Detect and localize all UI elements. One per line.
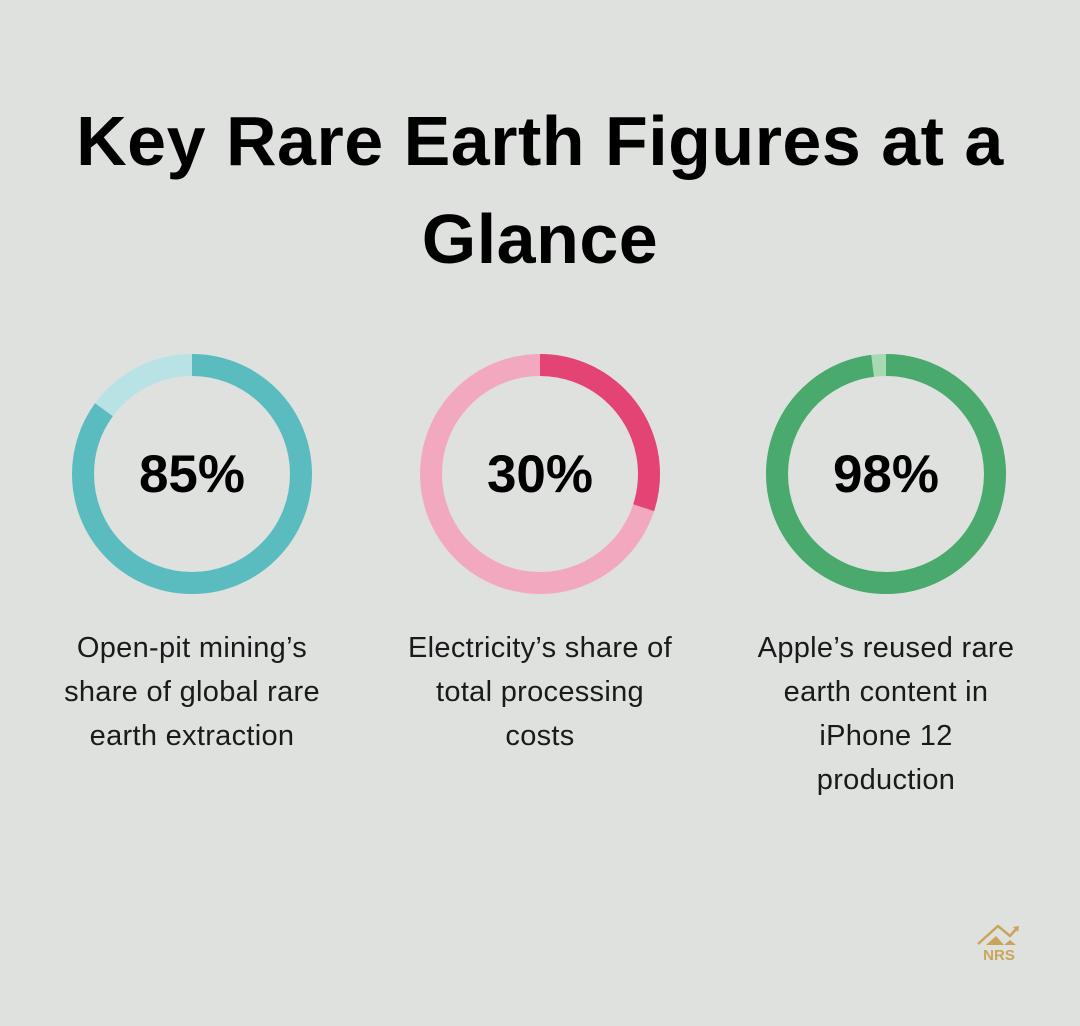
donut: 98%: 98%	[833, 445, 939, 504]
label: 30%: costs	[505, 720, 575, 752]
donut: 98%	[777, 365, 995, 583]
label: 30%: Electricity’s share of	[408, 632, 672, 664]
label: 85%: share of global rare	[64, 676, 320, 708]
label: 85%: Open-pit mining’s	[77, 632, 307, 664]
title: Glance	[422, 200, 658, 278]
label: 85%: earth extraction	[90, 720, 294, 752]
label: 98%	[758, 632, 1014, 796]
logo: NRS	[978, 926, 1019, 964]
donut: 85%: 85%	[139, 445, 245, 504]
label: 98%: Apple’s reused rare	[758, 632, 1014, 664]
logo: NRS: NRS	[983, 947, 1015, 964]
title: Key Rare Earth Figures at a	[76, 102, 1004, 180]
title	[76, 102, 1004, 278]
label: 98%: iPhone 12	[819, 720, 953, 752]
donut: 30%	[431, 365, 649, 583]
label: 30%: total processing	[436, 676, 644, 708]
label: 98%: production	[817, 764, 955, 796]
donut: 85%	[83, 365, 301, 583]
label: 98%: earth content in	[784, 676, 988, 708]
label: 85%	[64, 632, 320, 752]
donut: 30%: 30%	[487, 445, 593, 504]
label: 30%	[408, 632, 672, 752]
